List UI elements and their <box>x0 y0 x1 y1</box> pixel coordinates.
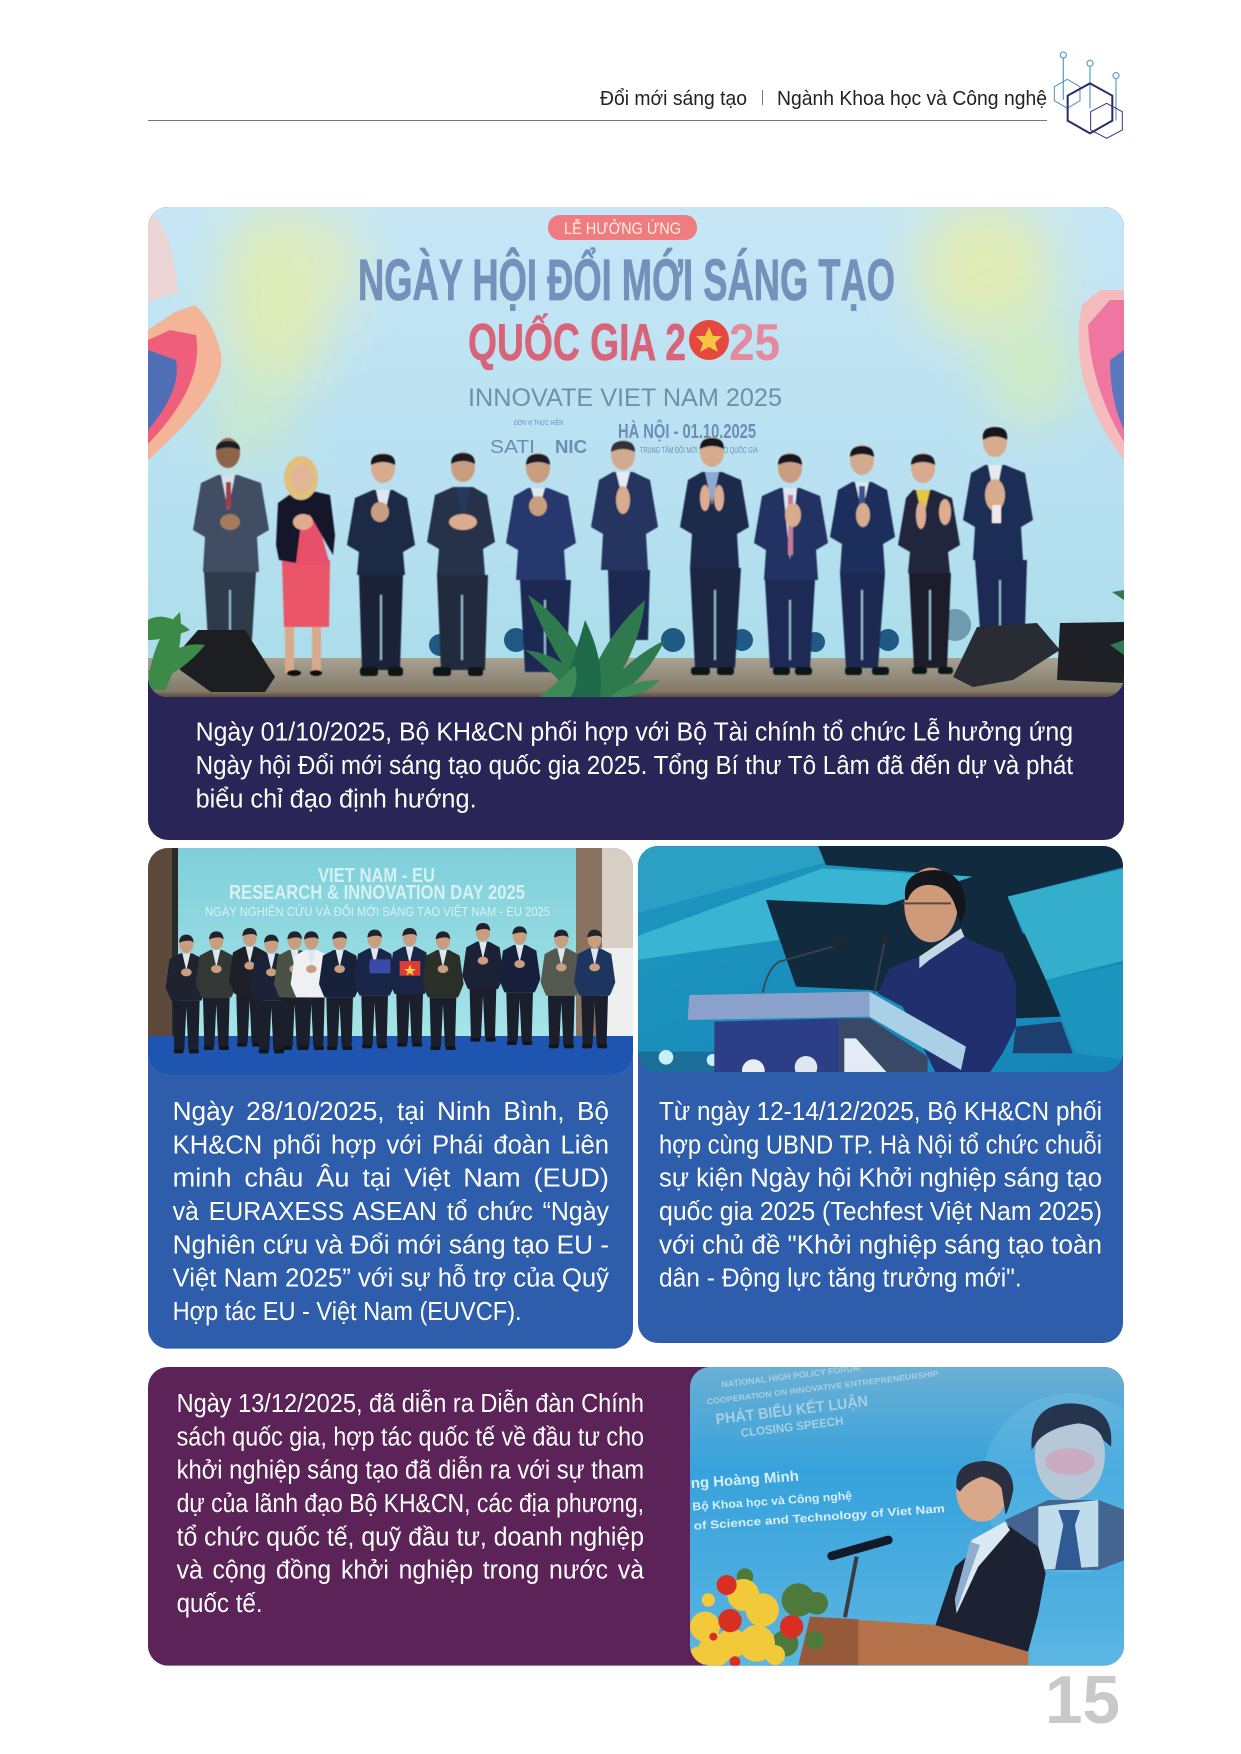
screen small print: HÀ NỘI - 01.10.2025 <box>618 419 756 443</box>
page number: 15 <box>1045 1662 1120 1738</box>
photo: speaker at podium <box>636 843 1126 1082</box>
text block: Nghiên cứu và Đổi mới sáng tạo EU - <box>173 1231 609 1259</box>
text block: khởi nghiệp sáng tạo đã diễn ra với sự tham <box>177 1456 644 1485</box>
caption: biểu chỉ đạo định hướng. <box>196 786 477 814</box>
plant right <box>1110 590 1124 655</box>
text block: quốc gia 2025 (Techfest Việt Nam 2025) <box>659 1198 1102 1226</box>
text block: dự của lãnh đạo Bộ KH&CN, các địa phương, <box>177 1490 644 1518</box>
text block <box>173 1098 609 1326</box>
plant center <box>525 595 665 697</box>
text block: Hợp tác EU - Việt Nam (EUVCF). <box>173 1298 522 1326</box>
speaker far right <box>1057 622 1124 683</box>
text block: sách quốc gia, hợp tác quốc tế về đầu tư cho <box>177 1423 644 1451</box>
text block: hợp cùng UBND TP. Hà Nội tổ chức chuỗi <box>659 1130 1102 1159</box>
speaker <box>935 1461 1046 1653</box>
text block: tổ chức quốc tế, quỹ đầu tư, doanh nghiệp <box>177 1523 644 1551</box>
screen small print: TRUNG TÂM ĐỔI MỚI SÁNG TẠO QUỐC GIA <box>640 445 758 455</box>
screen heading: NATIONAL HIGH POLICY FORUM <box>721 1363 861 1390</box>
screen title: NGÀY HỘI ĐỔI MỚI SÁNG TẠO <box>358 248 895 313</box>
screen text <box>205 865 550 919</box>
panel: EU research day <box>148 848 633 1349</box>
screen name: ng Hoàng Minh <box>690 1469 799 1492</box>
screen text: VIET NAM - EU <box>318 865 435 887</box>
text block: Từ ngày 12-14/12/2025, Bộ KH&CN phối <box>659 1098 1102 1126</box>
microphones <box>763 947 833 993</box>
text block: với chủ đề "Khởi nghiệp sáng tạo toàn <box>659 1231 1102 1259</box>
panel: national innovation day <box>148 200 1124 840</box>
caption <box>196 718 1073 814</box>
photo: stage with officials <box>148 200 1124 697</box>
portrait on screen <box>1005 1403 1125 1570</box>
screen small print <box>490 418 758 457</box>
speaker <box>878 932 1016 1073</box>
panel: policy forum <box>148 1353 1162 1668</box>
screen heading <box>707 1367 938 1437</box>
stage floor <box>148 658 1124 697</box>
lights <box>638 1050 714 1072</box>
screen small print: SATI <box>490 437 535 457</box>
speaker left <box>178 630 275 692</box>
screen title <box>358 248 895 372</box>
speaker right <box>953 623 1060 687</box>
icon: hexagons with nodes <box>1054 52 1122 138</box>
text block: sự kiện Ngày hội Khởi nghiệp sáng tạo <box>659 1165 1102 1193</box>
text block: Ngày 28/10/2025, tại Ninh Bình, Bộ <box>173 1098 609 1126</box>
screen name: of Science and Technology of Viet Nam <box>693 1503 945 1533</box>
screen subtitle: INNOVATE VIET NAM 2025 <box>468 384 782 412</box>
podium <box>798 1617 1028 1665</box>
stage lights <box>429 609 971 656</box>
screen name: Bộ Khoa học và Công nghệ <box>692 1490 852 1513</box>
caption: Ngày 01/10/2025, Bộ KH&CN phối hợp với Bộ Tài chính tổ chức Lễ hưởng ứng <box>196 718 1073 746</box>
panel: Techfest <box>636 843 1126 1343</box>
photo: group on blue stage <box>148 848 633 1076</box>
caption: Ngày hội Đổi mới sáng tạo quốc gia 2025. Tổng Bí thư Tô Lâm đã đến dự và phát <box>196 752 1073 780</box>
microphone <box>832 1540 888 1617</box>
text block: minh châu Âu tại Việt Nam (EUD) <box>173 1164 609 1193</box>
flowers <box>688 1568 828 1667</box>
screen text: NGÀY NGHIÊN CỨU VÀ ĐỔI MỚI SÁNG TẠO VIỆT NAM - EU 2025 <box>205 904 550 919</box>
screen badge <box>548 215 697 240</box>
text block: Ngày 13/12/2025, đã diễn ra Diễn đàn Chính <box>177 1389 644 1418</box>
officials <box>193 427 1033 676</box>
text block: quốc tế. <box>177 1590 263 1618</box>
screen small print: ĐƠN VỊ THỰC HIỆN <box>514 418 563 427</box>
screen heading: PHÁT BIỂU KẾT LUẬN <box>715 1392 869 1428</box>
text block: và EURAXESS ASEAN tổ chức “Ngày <box>173 1198 609 1226</box>
screen text: RESEARCH & INNOVATION DAY 2025 <box>229 882 525 904</box>
text block: dân - Động lực tăng trưởng mới". <box>659 1265 1022 1293</box>
header text: section: Đổi mới sáng tạo <box>600 87 747 110</box>
screen title: 25 <box>729 314 780 372</box>
header <box>148 87 1047 120</box>
screen badge: LỄ HƯỞNG ỨNG <box>564 219 681 238</box>
screen heading: CLOSING SPEECH <box>740 1414 844 1440</box>
podium <box>714 1018 839 1073</box>
screen small print: NIC <box>555 437 587 457</box>
screen name <box>692 1470 944 1530</box>
header text: category: Ngành Khoa học và Công nghệ <box>777 87 1047 110</box>
screen heading: COOPERATION ON INNOVATIVE ENTREPRENEURSHIP <box>706 1369 940 1406</box>
text block <box>659 1098 1102 1293</box>
screen title: QUỐC GIA 2 <box>468 313 686 372</box>
photo: speaker with flowers <box>690 1367 1124 1666</box>
delegates <box>166 923 615 1053</box>
text block <box>177 1389 645 1618</box>
text block: và cộng đồng khởi nghiệp trong nước và <box>177 1557 645 1585</box>
text block: KH&CN phối hợp với Phái đoàn Liên <box>173 1131 609 1159</box>
plant left <box>148 612 205 690</box>
text block: Việt Nam 2025” với sự hỗ trợ của Quỹ <box>173 1264 609 1293</box>
